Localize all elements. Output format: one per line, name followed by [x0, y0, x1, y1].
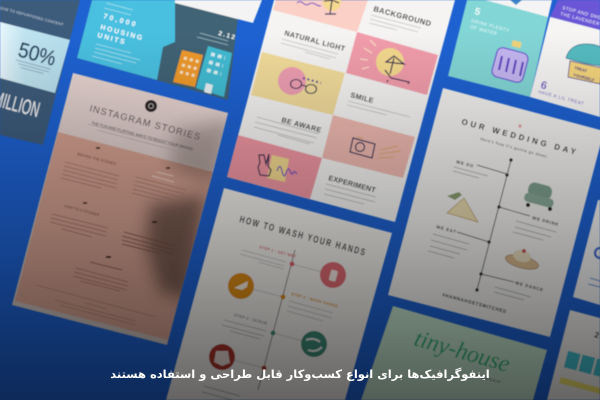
icon: beach chair and umbrella [385, 56, 409, 84]
stat band: 50%: 50% [16, 39, 58, 71]
heading: how to wash your hands: HOW TO WASH YOUR HANDS [238, 213, 367, 258]
timeline labels [436, 159, 560, 293]
icon: champagne tower [447, 192, 478, 222]
panel: instagram stories [12, 73, 232, 345]
yellow bar [559, 377, 600, 394]
card: be aware [254, 115, 323, 144]
stat: 2.12: 2.12 [217, 30, 236, 41]
section: behind the scenes: BEHIND THE SCENES [77, 152, 117, 166]
footer text [36, 285, 156, 325]
icon: wedding car [523, 181, 555, 211]
panel: housing units (top center teal card) [77, 0, 262, 100]
heading: 70,000 housing units: 70,000 [102, 13, 136, 28]
section: right column 2 [122, 222, 176, 254]
card: drink water: DRINK PLENTY [471, 18, 510, 33]
stat band: 50% [0, 22, 70, 93]
panel: how to wash your hands [166, 188, 392, 400]
section: how to s stories [50, 203, 108, 237]
card: experiment [324, 173, 377, 204]
stat: 2.12 [197, 30, 236, 45]
subtitle: THE FUN AND FLIRTING WAYS TO BOOST YOUR BRAND [91, 120, 194, 152]
step 2 marker and icon: STEP 2 : WASH HANDS [291, 292, 338, 308]
icon: cake [504, 248, 540, 272]
panel: tips grid (top center pastel cards) [227, 0, 455, 222]
icon: camera [350, 137, 401, 158]
panel: right side card [573, 200, 600, 305]
shadow: palm leaf [146, 120, 232, 300]
heading: 70,000 housing units: UNITS [96, 32, 126, 46]
icon: blue building [196, 46, 232, 97]
card: purple lavender: THE LAVENDER [560, 11, 600, 27]
number: 2 [593, 330, 600, 340]
card: light pink camera [322, 115, 415, 178]
card: have a lil treat [530, 17, 600, 117]
panel: tiny house [361, 306, 547, 400]
timeline labels: WE DO [456, 159, 475, 169]
card: smile: SMILE [349, 90, 375, 105]
card: drink water [448, 0, 552, 97]
step 3 marker and icon [222, 313, 327, 357]
step 1 marker and icon: STEP 1 : GET WET [259, 245, 297, 259]
timeline labels: WE DRINK [532, 215, 560, 227]
teal squares [566, 359, 600, 370]
description lines [428, 167, 556, 300]
heading: instagram stories: INSTAGRAM STORIES [88, 102, 202, 142]
card: drink water: OF WATER [470, 24, 498, 36]
card: pink peace hand [227, 135, 322, 199]
icon: sunglasses [290, 78, 321, 94]
card: drink water: 5 [473, 6, 482, 18]
caption: اینفوگرافیک‌ها برای انواع کسب‌وکار قابل طراحی و استفاده هستند [110, 367, 490, 381]
step 2 marker and icon [228, 273, 338, 321]
step 3 marker and icon: STEP 3 : SCRUB [234, 313, 268, 326]
small text: repurposed content: DUE TO REPURPOSED CONTENT [0, 6, 65, 27]
icon: cupcake [566, 44, 600, 84]
panel: our wedding day [388, 88, 600, 337]
icon: water jar [491, 40, 529, 84]
step 1 marker and icon [240, 245, 346, 288]
card: pink sun umbrella [346, 32, 438, 95]
icon: orange building [173, 50, 203, 87]
icon: blue arc [595, 248, 600, 258]
subtitle: Here's how it's gonna go down. [480, 136, 549, 159]
panel: housing statistics (top left navy card) [0, 0, 80, 145]
hashtag: #HANNAHGETSMITCHED [442, 292, 507, 314]
timeline labels: WE EAT [436, 224, 457, 234]
timeline [457, 159, 530, 291]
icon: cupcake: TREAT [574, 65, 588, 73]
card: purple lavender [550, 0, 600, 30]
timeline labels: WE DANCE [515, 280, 544, 293]
card: palm tree [273, 0, 368, 32]
card: have a lil treat: 6 [539, 79, 548, 92]
step 4 marker and icon [202, 344, 266, 400]
section: how to s stories: HOW TO S STORIES [64, 204, 100, 217]
card: natural light: NATURAL LIGHT [283, 28, 347, 53]
icon: heart [518, 124, 522, 128]
panel: bottom right card [547, 310, 600, 400]
heading: tiny-house script: tiny-house [411, 326, 513, 378]
card: yellow sunglasses [251, 52, 345, 115]
card: have a lil treat: HAVE A LIL TREAT [538, 89, 585, 106]
card: background: BACKGROUND [372, 4, 433, 28]
section: behind the scenes [61, 148, 119, 188]
icon: cupcake: YOURSELF [573, 72, 596, 83]
panel: hydration tips (top right cards) [448, 0, 600, 117]
heading: 70,000 housing units [96, 13, 143, 46]
card: experiment: EXPERIMENT [327, 173, 377, 195]
subheading: OWNERSHIP [470, 371, 502, 385]
section: right column 1 [132, 168, 186, 202]
card: be aware: BE AWARE [280, 115, 323, 135]
card: smile [347, 90, 410, 117]
section: center column [73, 257, 128, 291]
heading: 70,000 housing units: HOUSING [99, 24, 143, 42]
timeline [258, 250, 295, 390]
heading: our wedding day: OUR WEDDING DAY [460, 117, 577, 157]
icon: peace hand [258, 154, 271, 176]
icon: instagram logo [145, 100, 157, 112]
